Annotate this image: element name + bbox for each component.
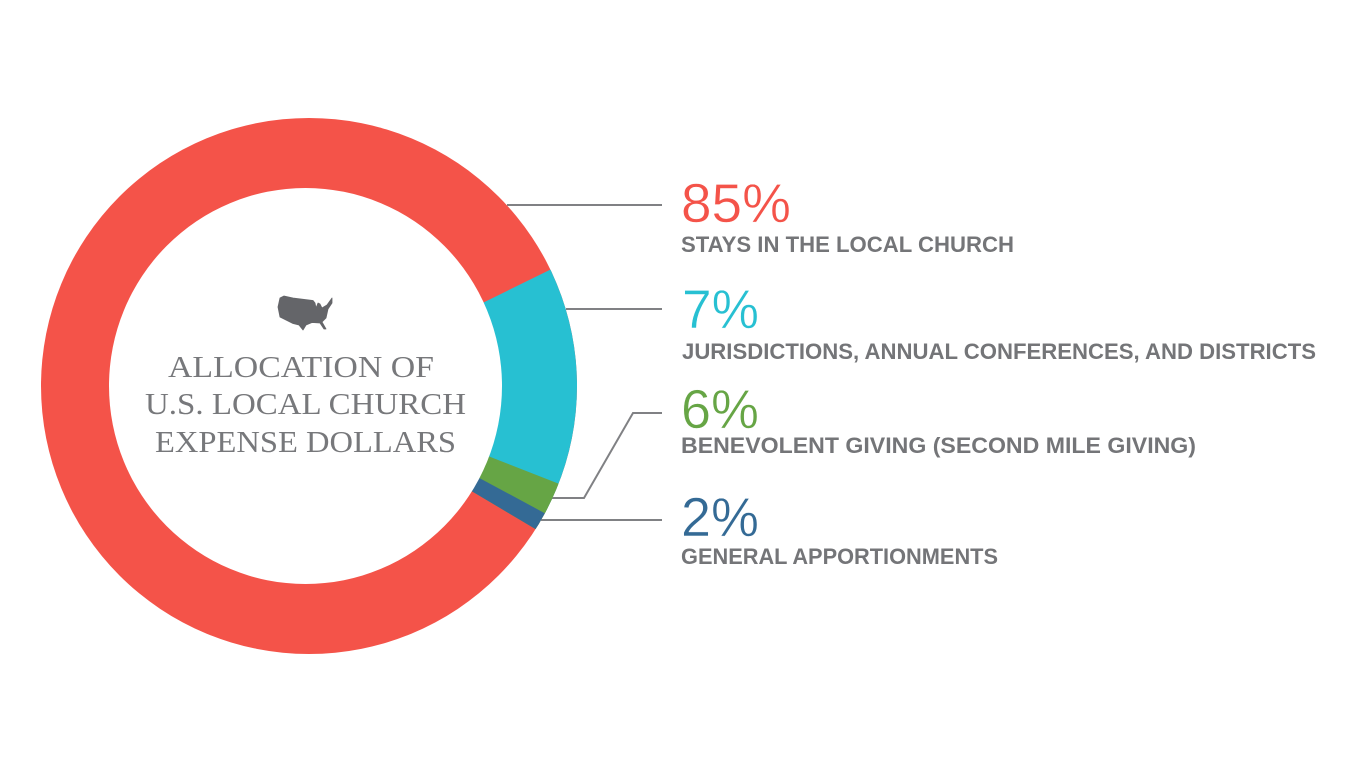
icon: map of the United States	[278, 296, 332, 330]
center title: ALLOCATION OF	[168, 349, 434, 384]
legend item: 7%: 7%	[682, 278, 759, 340]
leader line: 2%	[541, 519, 662, 521]
legend item: 2%: GENERAL APPORTIONMENTS	[681, 544, 998, 569]
legend item: 6%	[681, 378, 1196, 458]
leader line: 6%	[552, 413, 662, 498]
donut hole	[109, 188, 502, 584]
leader line: 85%	[507, 204, 662, 206]
segment: 2% general apportionments	[472, 478, 545, 529]
segment: 85% local church	[41, 118, 577, 654]
leader line: 7%	[566, 308, 662, 310]
center title	[145, 349, 466, 459]
center title: U.S. LOCAL CHURCH	[145, 386, 466, 421]
legend item: 2%	[681, 486, 998, 569]
legend item: 6%: 6%	[681, 378, 759, 440]
legend item: 85%: 85%	[681, 172, 791, 234]
legend item: 85%	[681, 172, 1014, 257]
segment: 6% benevolent giving	[472, 456, 558, 529]
legend item: 2%: 2%	[681, 486, 759, 548]
infographic canvas	[41, 118, 1316, 654]
legend item: 7%: JURISDICTIONS, ANNUAL CONFERENCES, AND DISTRICTS	[682, 339, 1316, 364]
segment: 7% jurisdictions	[484, 270, 577, 514]
donut chart	[41, 118, 620, 654]
legend item: 7%	[682, 278, 1316, 364]
legend item: 6%: BENEVOLENT GIVING (SECOND MILE GIVING)	[681, 433, 1196, 458]
legend item: 85%: STAYS IN THE LOCAL CHURCH	[681, 232, 1014, 257]
center title: EXPENSE DOLLARS	[155, 424, 456, 459]
